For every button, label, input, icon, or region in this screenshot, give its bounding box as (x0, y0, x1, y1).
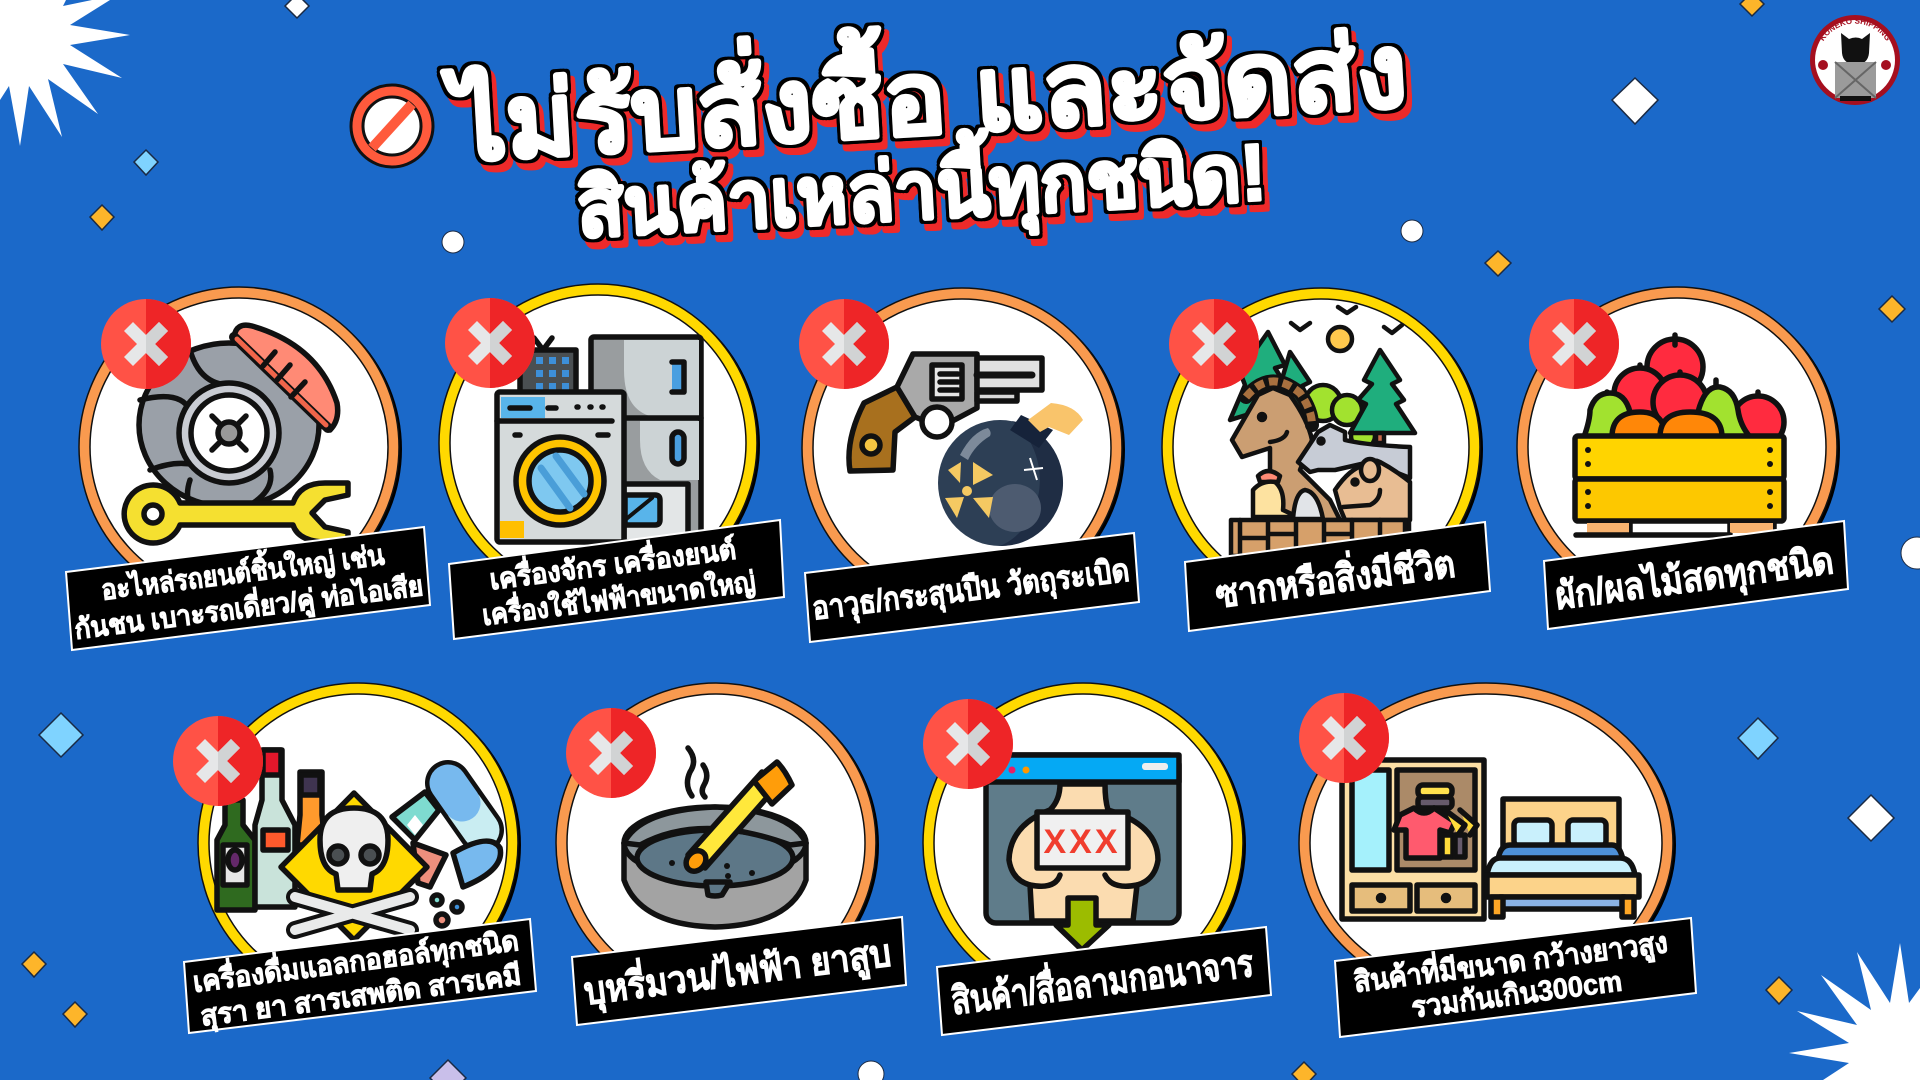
ring (923, 683, 1246, 1005)
icon: appliances (497, 337, 701, 542)
label (1185, 522, 1490, 631)
panel: carcasses and living animals (1162, 288, 1490, 631)
icon: capsules and pills (392, 783, 501, 926)
icon: animals and forest (1230, 307, 1415, 556)
icon: bomb (938, 403, 1083, 546)
icon: tyre and wrench (124, 325, 348, 543)
panel: weapons (799, 288, 1139, 642)
panel: cigarettes and tobacco (556, 683, 906, 1025)
title line 2: สินค้าเหล่านี้ทุกชนิด! (574, 113, 1269, 260)
icon: ashtray with cigarette (624, 748, 806, 927)
ring (556, 683, 879, 1005)
ring (1517, 287, 1840, 609)
label: อาวุธ/กระสุนปืน วัตถุระเบิด (810, 552, 1132, 629)
panel: oversized goods (1299, 683, 1696, 1037)
ring (439, 284, 760, 604)
icon: bed (1487, 799, 1639, 917)
label (184, 919, 536, 1034)
label (66, 527, 430, 650)
panel: pornographic media (923, 683, 1271, 1035)
label: สุรา ยา สารเสพติด สารเคมี (199, 959, 523, 1034)
label: สินค้าที่มีขนาด กว้างยาวสูง (1351, 921, 1670, 1000)
ring (1299, 683, 1676, 1005)
label (937, 927, 1271, 1035)
prohibited mark (101, 299, 191, 389)
prohibited mark (1529, 299, 1619, 389)
prohibited mark (923, 699, 1013, 789)
label: เครื่องจักร เครื่องยนต์ (487, 529, 738, 595)
label: เครื่องดื่มแอลกอฮอล์ทุกชนิด (191, 920, 521, 1000)
icon: skull and crossbones on hazard sign (281, 793, 427, 940)
icon: prohibited sign (351, 85, 433, 167)
logo: KONEKO SHIPPING (1821, 20, 1889, 41)
label: กันชน เบาะรถเดี่ยว/คู่ ท่อไอเสีย (72, 565, 425, 647)
label (805, 533, 1139, 642)
logo (1810, 15, 1900, 105)
label (1335, 918, 1696, 1037)
panel: alcohol, drugs and chemicals (173, 683, 536, 1034)
ring (1162, 288, 1483, 608)
label: รวมกันเกิน300cm (1410, 966, 1624, 1024)
label: สินค้า/สื่อลามกอนาจาร (948, 936, 1256, 1023)
title (440, 0, 1410, 260)
icon: censored browser window (986, 755, 1179, 950)
icon: bottles (217, 750, 325, 910)
prohibited mark (1299, 693, 1389, 783)
icon: censored browser window: XXX (1043, 823, 1121, 861)
label: อะไหล่รถยนต์ชิ้นใหญ่ เช่น (99, 533, 386, 607)
panel: car parts (66, 287, 430, 650)
icon: revolver (849, 354, 1042, 471)
label: บุหรี่มวน/ไฟฟ้า ยาสูบ (581, 926, 894, 1016)
prohibited mark (566, 708, 656, 798)
icon: wardrobe (1342, 760, 1484, 919)
label: ผัก/ผลไม้สดทุกชนิด (1553, 538, 1836, 620)
label: ซากหรือสิ่งมีชีวิต (1212, 537, 1458, 617)
icon: fruit crate (1575, 335, 1784, 535)
prohibited mark (173, 716, 263, 806)
ring (79, 287, 402, 609)
prohibited mark (799, 299, 889, 389)
prohibited mark (1169, 299, 1259, 389)
label: เครื่องใช้ไฟฟ้าขนาดใหญ่ (480, 561, 757, 632)
title line 1: ไม่รับสั่งซื้อ และจัดส่ง (440, 0, 1410, 183)
label (449, 520, 784, 639)
ring (802, 288, 1125, 610)
panel: machinery and appliances (439, 284, 784, 639)
prohibited mark (445, 298, 535, 388)
ring (198, 683, 521, 1005)
panel: fresh vegetables and fruit (1517, 287, 1848, 629)
